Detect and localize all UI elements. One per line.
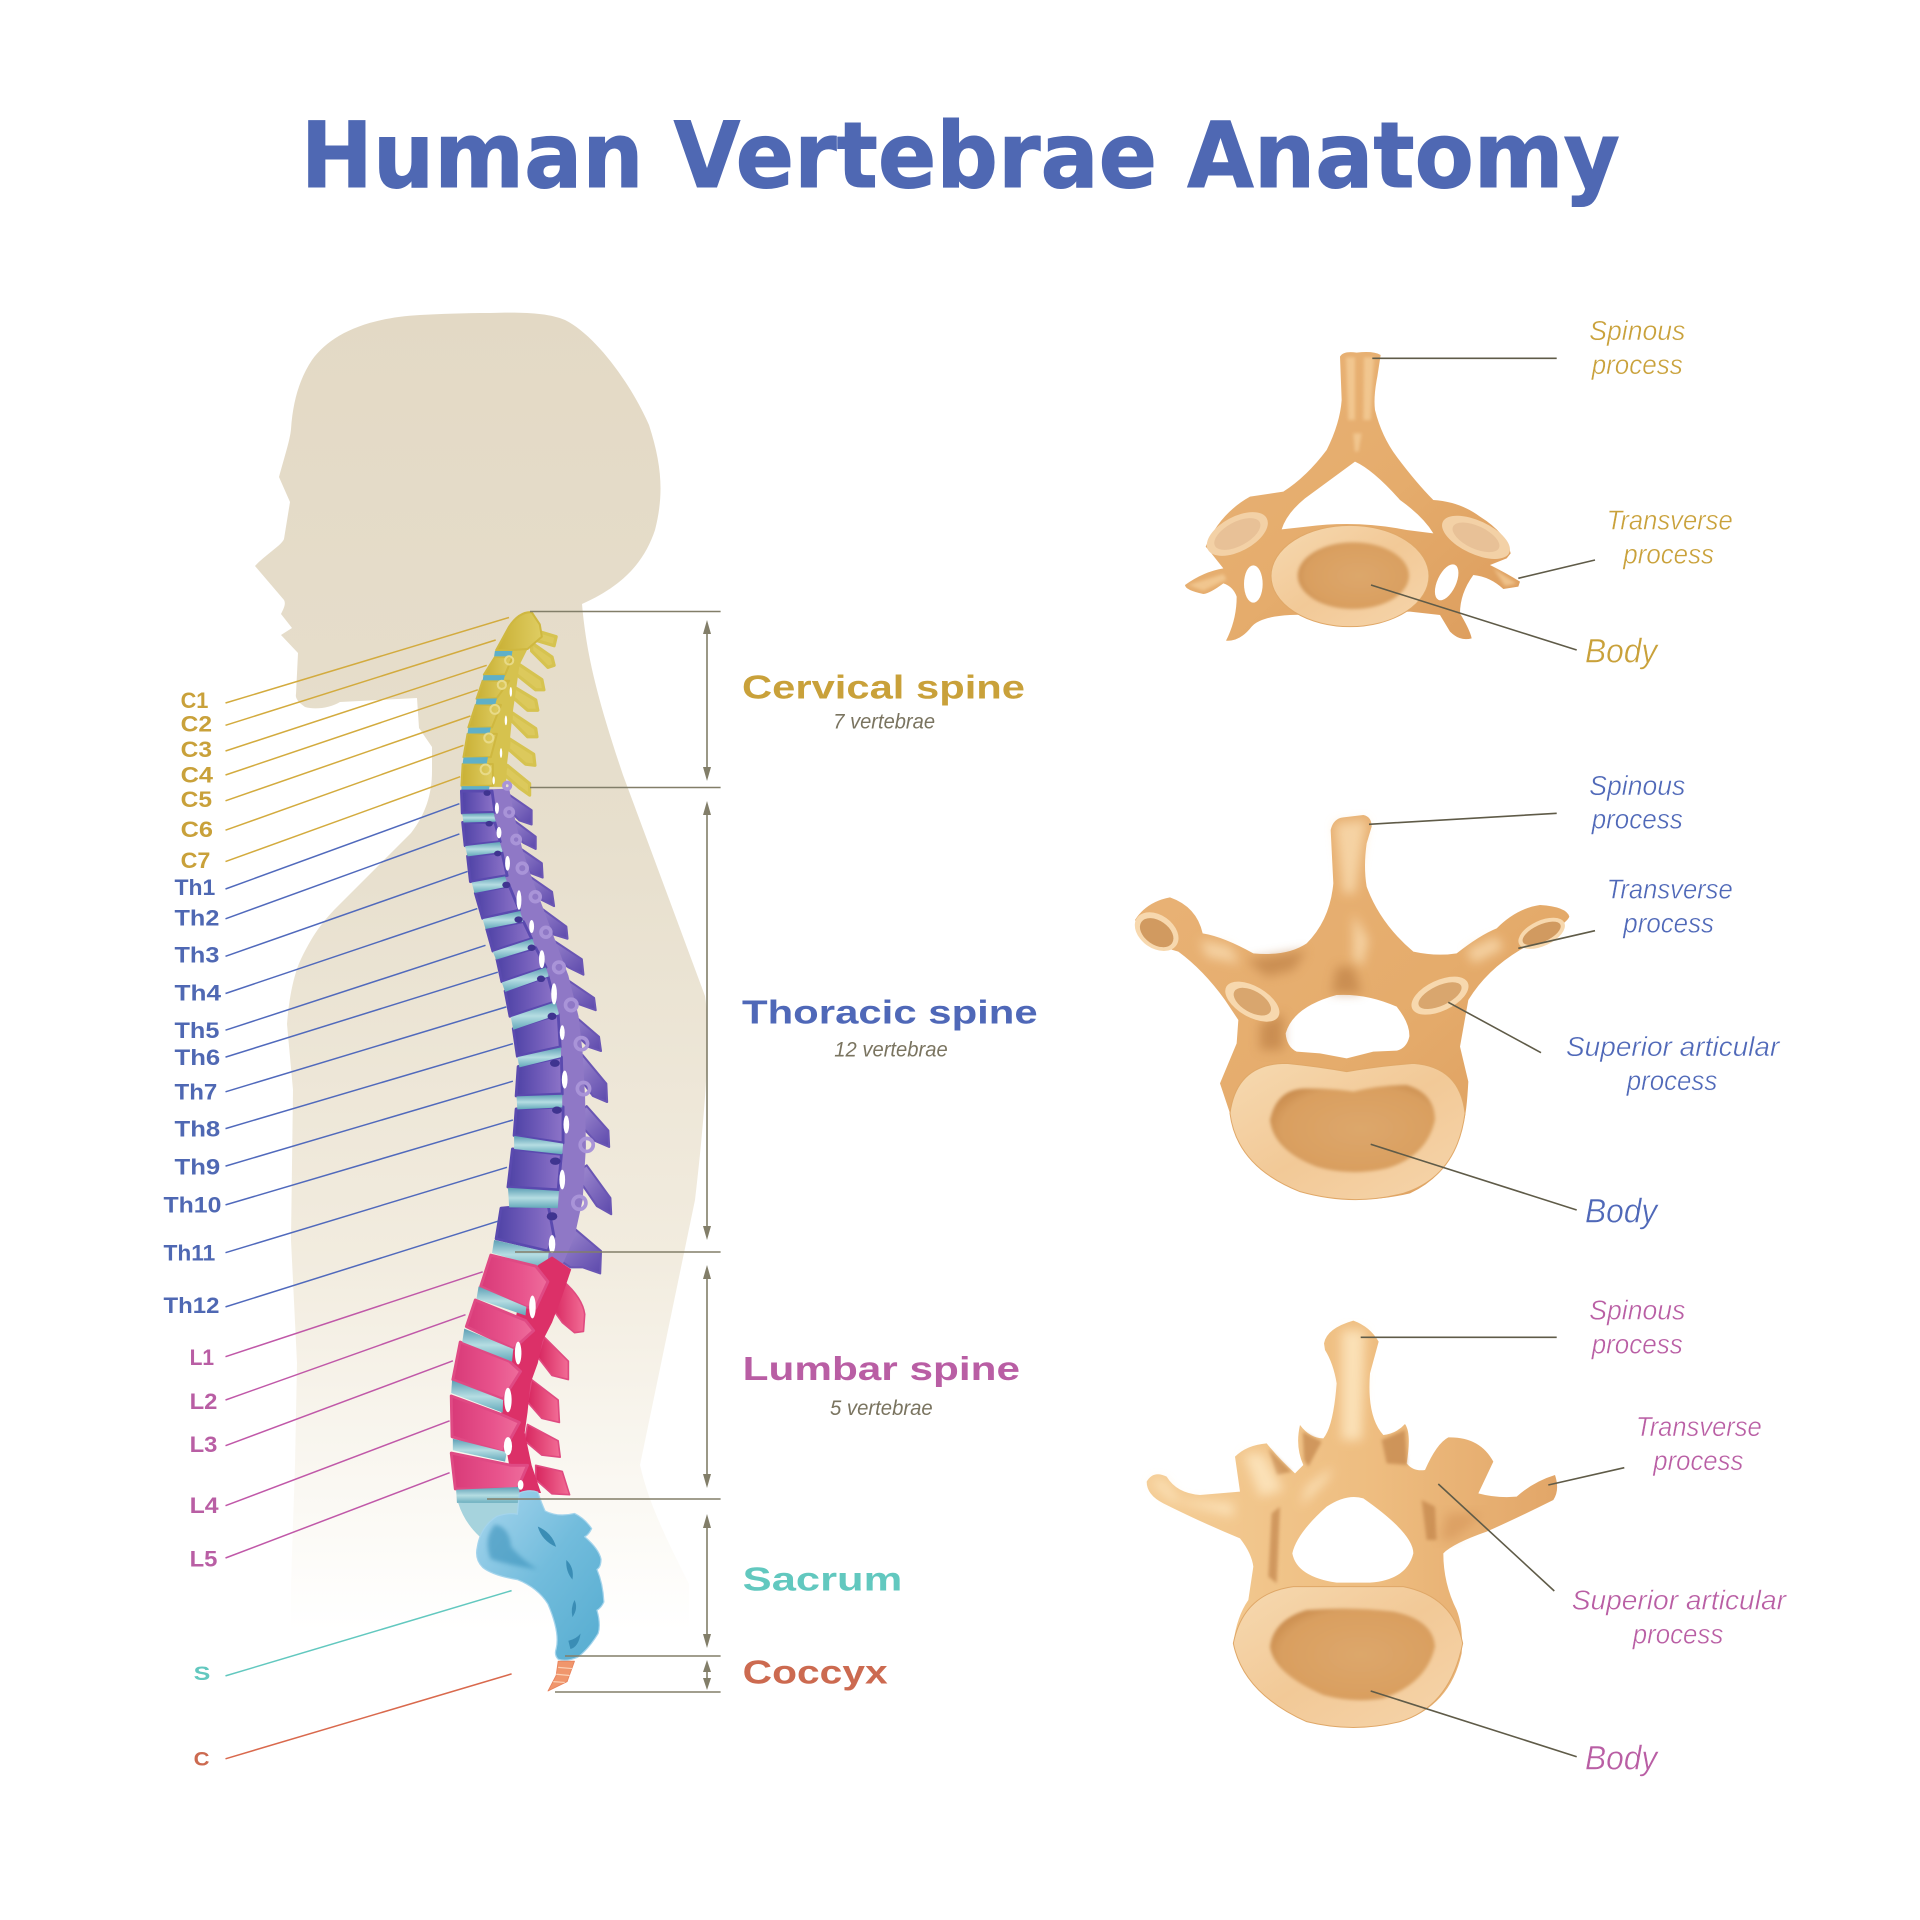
- lumbar vertebral body: [1233, 1587, 1463, 1727]
- segment label: Th6: Th6: [174, 1045, 220, 1070]
- thoracic labels and leaders: process: [1591, 803, 1683, 834]
- thoracic labels and leaders: process: [1622, 908, 1714, 939]
- lumbar, sacrum and coccyx: [451, 1255, 604, 1691]
- cervical labels and leaders: Spinous: [1589, 315, 1685, 346]
- thoracic labels and leaders: Spinous: [1589, 770, 1685, 801]
- thoracic vertebral body: [1230, 1063, 1465, 1200]
- segment label: L1: L1: [190, 1345, 214, 1370]
- segment label: C4: C4: [181, 762, 214, 787]
- segment label: C1: [181, 618, 509, 713]
- segment label: L3: L3: [190, 1432, 217, 1457]
- segment label: Th12: Th12: [164, 1293, 219, 1318]
- spine illustration: [451, 612, 611, 1691]
- lumbar labels and leaders: [1361, 1294, 1788, 1777]
- segment label: Th4: [174, 909, 477, 1005]
- segment label: Th8: Th8: [174, 1116, 220, 1141]
- segment label: Th7: [174, 1007, 506, 1105]
- cervical vertebra diagram: [1185, 352, 1520, 641]
- lumbar labels and leaders: Transverse: [1636, 1411, 1762, 1442]
- segment label: Th2: Th2: [174, 906, 219, 931]
- heading: coccyx: Coccyx: [743, 1653, 888, 1690]
- heading: lumbar spine: 5 vertebrae: [830, 1397, 933, 1420]
- heading: cervical spine: [742, 668, 1025, 733]
- segment label: S: S: [194, 1664, 210, 1685]
- segment label: L5: [190, 1473, 450, 1572]
- cervical labels and leaders: process: [1622, 538, 1714, 569]
- lumbar labels and leaders: Spinous: [1589, 1294, 1685, 1325]
- segment label: C6: [181, 745, 464, 842]
- segment label: Th11: [164, 1167, 507, 1265]
- segment label: C5: C5: [181, 787, 212, 812]
- cervical labels and leaders: Transverse: [1607, 504, 1733, 535]
- segment label: C2: C2: [181, 711, 212, 736]
- coccyx: [548, 1661, 574, 1691]
- heading: cervical spine: 7 vertebrae: [833, 710, 935, 733]
- bracket lines and arrows: [487, 612, 721, 1692]
- segment label: Th2: [174, 834, 459, 931]
- cervical vertebrae: [461, 612, 556, 795]
- segment label: Th3: Th3: [174, 942, 219, 967]
- heading: lumbar spine: Lumbar spine: [743, 1350, 1020, 1387]
- thoracic articular facets: [1127, 904, 1570, 1030]
- segment label: C6: C6: [181, 817, 213, 842]
- segment label: C: C: [194, 1750, 210, 1771]
- segment label: Th3: [174, 871, 468, 967]
- segment label: C4: [181, 690, 478, 787]
- cervical articular facets and foramina: [1200, 503, 1516, 604]
- segment label: C3: [181, 665, 487, 762]
- lumbar labels and leaders: process: [1632, 1618, 1723, 1649]
- thoracic labels and leaders: Transverse: [1607, 873, 1733, 904]
- segment label: Th6: [174, 972, 498, 1070]
- body silhouette: [255, 313, 708, 1630]
- lumbar vertebrae: [451, 1255, 585, 1504]
- segment label: Th4: Th4: [174, 980, 222, 1005]
- segment label: Th8: [174, 1044, 513, 1141]
- segment label: Th9: [174, 1081, 513, 1179]
- lumbar labels and leaders: Body: [1585, 1739, 1659, 1777]
- title: Human Vertebrae Anatomy: [301, 104, 1620, 209]
- heading: lumbar spine: [743, 1350, 1020, 1420]
- segment label: C1: C1: [181, 688, 208, 713]
- thoracic labels and leaders: process: [1626, 1065, 1717, 1096]
- segment label: C5: [181, 716, 470, 812]
- segment label: C3: C3: [181, 737, 212, 762]
- segment label: L2: [190, 1315, 466, 1414]
- lumbar labels and leaders: process: [1591, 1328, 1683, 1359]
- segment label: Th5: [174, 945, 486, 1043]
- segment label: Th10: [164, 1120, 513, 1218]
- heading: thoracic spine: 12 vertebrae: [834, 1039, 948, 1062]
- segment label: Th7: Th7: [174, 1080, 217, 1105]
- segment label: Th10: Th10: [164, 1193, 221, 1218]
- lumbar labels and leaders: process: [1652, 1445, 1743, 1476]
- segment label: L5: L5: [190, 1546, 217, 1572]
- segment label: C7: [181, 777, 460, 873]
- heading: sacrum: Sacrum: [743, 1561, 902, 1598]
- thoracic labels and leaders: Superior articular: [1566, 1031, 1781, 1062]
- segment label: L3: [190, 1361, 453, 1457]
- thoracic labels and leaders: Body: [1585, 1193, 1659, 1231]
- thoracic vertebra diagram: [1127, 815, 1570, 1200]
- segment label: C2: [181, 640, 496, 736]
- segment label: L2: L2: [190, 1389, 217, 1414]
- segment label: Th9: Th9: [174, 1154, 220, 1179]
- lumbar vertebra diagram: [1147, 1321, 1557, 1727]
- segment label: C7: C7: [181, 848, 210, 873]
- heading: cervical spine: Cervical spine: [742, 668, 1025, 705]
- sacrum: [458, 1491, 604, 1660]
- segment label: L1: [190, 1272, 483, 1370]
- cervical labels and leaders: Body: [1585, 633, 1659, 671]
- segment label: L4: [190, 1421, 450, 1518]
- lumbar labels and leaders: Superior articular: [1572, 1584, 1788, 1615]
- heading: thoracic spine: Thoracic spine: [742, 993, 1038, 1030]
- thoracic vertebrae: [461, 782, 611, 1273]
- segment label: Th5: Th5: [174, 1018, 219, 1043]
- cervical labels and leaders: [1371, 315, 1733, 671]
- segment label: C: [194, 1674, 512, 1771]
- segment label: Th11: Th11: [164, 1240, 215, 1265]
- cervical vertebral body: [1271, 525, 1429, 627]
- heading: thoracic spine: [742, 993, 1038, 1062]
- segment label: Th1: [174, 804, 459, 900]
- segment label: S: [194, 1591, 512, 1685]
- thoracic labels and leaders: [1369, 770, 1781, 1231]
- segment label: Th1: Th1: [174, 875, 215, 900]
- segment label: Th12: [164, 1221, 498, 1318]
- segment label: L4: L4: [190, 1493, 219, 1518]
- cervical labels and leaders: process: [1591, 349, 1683, 380]
